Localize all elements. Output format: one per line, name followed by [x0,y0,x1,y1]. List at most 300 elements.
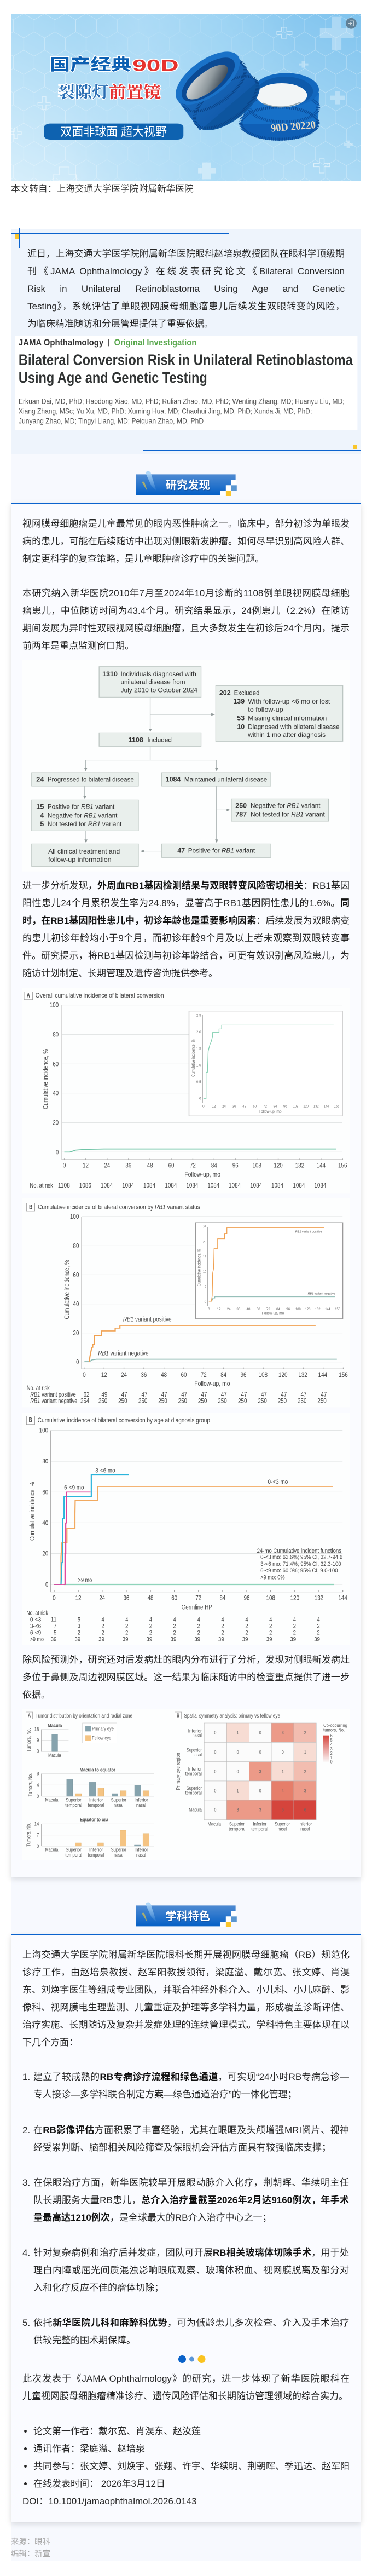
y axis labels: 20 [53,1119,59,1126]
y axis labels: 40 [42,1519,48,1526]
y axis title: Cumulative incidence, % [64,1260,71,1319]
heatmap values: 2 [304,1769,306,1774]
chart C: cumulative incidence by age at diagnosis: 2 [221,1629,224,1636]
text: intro paragraph: Risk in Unilateral Retinoblastoma Using Age and Genetic [27,284,345,294]
bars labels: Macula [45,1797,59,1803]
at risk rows: 47 [281,1391,287,1398]
at risk rows: 47 [321,1391,327,1398]
y axis labels: 60 [73,1271,79,1278]
heatmap legend: Co-occurring [323,1723,347,1728]
text: RB1 and age analysis paragraph: 件。研究提示，将RB1基因检测与初诊年龄结合，可更有效识别高风险患儿，为 [22,950,350,961]
heatmap legend [323,1723,347,1765]
bars labels: Macula [48,1753,61,1758]
text: discipline intro: 像科、视网膜电生理监测、儿童重症及护理等多学科力量，形成覆盖诊断评估、 [22,2002,350,2013]
list item 1 [22,2072,349,2100]
bars labels: Superior [66,1797,82,1803]
incidence curve [65,1149,336,1152]
bars labels: temporal [65,1853,82,1858]
list item 3: 队长期服务大量RB患儿，总介入治疗量截至2026年2月达9160例次，年手术 [33,2195,349,2205]
flow box labels: 15 [36,803,44,811]
flow box labels: 787 [235,811,247,819]
corner ornament: top left [11,228,229,248]
flow box labels: unilateral disease from [121,678,185,686]
age group curves [54,1474,334,1584]
inset chart: Cumulative incidence, % [191,1039,196,1077]
x axis labels: 144 [317,1161,326,1169]
bars labels: Superior [111,1797,126,1803]
inset chart: 48 [247,1307,251,1311]
chart C: cumulative incidence by age at diagnosis: 2 [78,1629,80,1636]
y axis labels: 60 [53,1060,59,1068]
x axis labels: 132 [315,1594,323,1601]
x axis labels [63,1161,347,1178]
bars labels: Inferior [135,1847,148,1853]
inset chart: 60 [253,1105,257,1108]
chart C: cumulative incidence by age at diagnosis: 4 [173,1616,176,1623]
flow box labels: Excluded [234,689,260,697]
inset chart: RB1 variant positive [295,1230,322,1234]
at risk rows: 47 [221,1391,227,1398]
at risk rows: 250 [118,1397,127,1404]
paper header card: JAMA Ophthalmology title block [15,336,358,430]
at risk table: >9 mo [30,1635,44,1643]
inset chart: 15 [203,1255,206,1259]
inset chart: Cumulative incidence, % [197,1248,202,1286]
chart C: cumulative incidence by age at diagnosis: 39 [123,1635,129,1643]
text: RB1 and age analysis paragraph: 进一步分析发现，外周血RB1基因检测结果与双眼转变风险密切相关：RB1基因 [22,880,350,891]
heatmap axis labels: Inferior [298,1822,312,1827]
bars labels: Inferior [89,1847,103,1853]
chart B: cumulative incidence by RB1 status [26,1203,348,1541]
heatmap cells [204,1723,316,1819]
list item 1: 专人接诊—多学科联合制定方案—绿色通道治疗”的一体化管理； [33,2089,297,2100]
inset chart: 96 [283,1105,287,1108]
text: tumor distribution paragraph [22,1655,350,1700]
chart C: cumulative incidence by age at diagnosis: 4 [197,1616,200,1623]
at risk row: 1084 [207,1182,220,1189]
chart C: cumulative incidence by age at diagnosis: 11 [51,1616,57,1623]
flow box labels: 5 [40,821,44,828]
inset chart: 10 [203,1270,206,1273]
text: intro paragraph: 刊《JAMA Ophthalmology》在线发表研究论文《Bilateral Conversion [27,266,345,276]
at risk rows: 250 [238,1397,247,1404]
at risk rows: 47 [181,1391,187,1398]
heatmap values: 0 [259,1788,261,1794]
heatmap axis labels: Macula [189,1807,202,1813]
heatmap legend: 4 [330,1742,333,1747]
heatmap values: 1 [282,1769,284,1774]
paper header card: JAMA Ophthalmology title block: JAMA Ophthalmology [19,338,103,348]
flow box labels: 139 [233,698,245,705]
chart C: cumulative incidence by age at diagnosis: 2 [269,1622,272,1629]
text: RB1 and age analysis paragraph: 阳性患儿24个月累积发生率为24.8%，显著高于RB1基因阴性患儿的1.6%。同 [22,898,350,908]
chart C: cumulative incidence by age at diagnosis: 2 [125,1622,128,1629]
heatmap legend: tumors, No. [323,1727,345,1733]
bars labels: 7 [37,1832,39,1838]
footer: source and editor [11,2537,50,2558]
curve labels: RB1 variant positive [123,1315,172,1323]
title: banner headline line 1: 90D [132,56,179,74]
flow box labels: 1310 [102,671,118,678]
heatmap values: 1 [237,1788,239,1794]
curve labels and 24-mo estimates: 6-<9 mo [64,1484,84,1491]
heatmap axis labels: nasal [300,1826,310,1832]
heatmap axis labels: nasal [193,1753,202,1757]
inset chart: 120 [303,1105,309,1108]
flow box labels: 250 [235,802,247,810]
lens: second blue lens with engraving [240,73,319,141]
chart C: cumulative incidence by age at diagnosis: 2 [246,1629,248,1636]
text: intro paragraph [27,249,345,329]
footer: source and editor: 来源：眼科 [11,2538,50,2546]
list item 2: 2. [22,2125,30,2135]
heatmap axis labels: Macula [208,1822,221,1827]
x axis labels: Germline HP [182,1603,212,1611]
y axis title: Cumulative incidence, % [29,1482,36,1541]
heatmap values: 6 [304,1807,306,1813]
y axis labels: 60 [42,1488,48,1496]
heatmap values: 0 [237,1750,239,1755]
at risk row: 1084 [250,1182,262,1189]
icon: decorative medical crosses [11,17,354,181]
at risk rows: 250 [198,1397,207,1404]
inset chart: 120 [305,1307,311,1311]
at risk rows: 47 [201,1391,207,1398]
y axis labels: 20 [42,1549,48,1557]
bars labels: 0 [37,1749,39,1754]
corner ornament: bottom right [143,436,361,454]
inset chart: 156 [334,1105,339,1108]
text: cohort paragraph [22,588,350,651]
heatmap values: 0 [259,1730,261,1736]
bars labels: Macula [45,1847,59,1853]
inset chart: 132 [315,1307,321,1311]
at risk row: 1084 [314,1182,327,1189]
list: authors and publication details [22,2426,350,2506]
heatmap values: 3 [237,1807,239,1813]
bars labels: Superior [111,1847,126,1853]
flow box labels: 1084 [166,776,181,783]
at risk table: 0-<3 [30,1616,41,1623]
chart C: cumulative incidence by age at diagnosis: 2 [125,1629,128,1636]
list item 4 [22,2247,349,2293]
chart C: cumulative incidence by age at diagnosis: 2 [173,1622,176,1629]
inset chart: 96 [286,1307,290,1311]
y axis labels: 0 [76,1358,79,1365]
heatmap values: 1 [237,1730,239,1736]
footer: source and editor: 编辑：新宣 [11,2550,50,2558]
inset chart [196,1223,343,1318]
panel: intro background [11,229,361,454]
y axis labels: 80 [53,1030,59,1038]
chart C: cumulative incidence by age at diagnosis: 4 [102,1616,104,1623]
inset chart: 2.0 [196,1031,201,1034]
x axis labels: 60 [168,1161,175,1169]
bars labels: 9 [37,1738,39,1743]
flow box labels: Positive for RB1 variant [48,803,114,811]
x axis labels: 108 [252,1161,261,1169]
chart C: cumulative incidence by age at diagnosis: 4 [125,1616,128,1623]
chart C: cumulative incidence by age at diagnosis: 2 [149,1629,152,1636]
title: banner headline line 2: 前置镜 [109,79,161,102]
list item 5: 5. [22,2318,30,2328]
x axis labels: 144 [318,1370,327,1378]
heatmap values: 0 [259,1750,261,1755]
heatmap values: 4 [282,1788,284,1794]
bars grid [42,1729,154,1846]
text: closing paragraph: 儿童视网膜母细胞瘤精准诊疗、遗传风险评估和长期随访管理领域的综合实力。 [22,2391,348,2401]
inset chart: 12 [212,1105,216,1108]
at risk rows: 47 [261,1391,267,1398]
at risk table: No. at risk [26,1609,48,1616]
flow box labels: Included [147,736,172,744]
list: authors and publication details: 共同参与：张文婷、刘焕宇、张翔、许宇、华续明、荆朝晖、季迅达、赵军阳 [33,2461,350,2471]
at risk row: 1084 [293,1182,305,1189]
lens: first blue lens with glass [164,43,271,139]
text: RB1 and age analysis paragraph [22,880,350,978]
at risk row: 1084 [122,1182,134,1189]
heatmap legend: 0 [330,1759,333,1765]
x axis labels: 72 [190,1161,196,1169]
at risk rows: 250 [178,1397,187,1404]
at risk rows: 47 [142,1391,147,1398]
chart C: cumulative incidence by age at diagnosis: 2 [102,1622,104,1629]
heatmap values: 3 [259,1769,261,1774]
x axis labels: 132 [295,1161,304,1169]
x axis labels: 132 [298,1370,307,1378]
list: authors and publication details: 论文第一作者：戴尔宽、肖淏东、赵汝莲 [33,2426,201,2436]
chart A: overall cumulative incidence [24,992,347,1319]
heatmap values: 3 [282,1730,284,1736]
text: cohort paragraph: 本研究纳入新华医院2010年7月至2024年10月诊断的1108例单眼视网膜母细胞 [22,588,350,598]
at risk rows: 47 [301,1391,307,1398]
text: background paragraph: 病的患儿，可能在后续随访中出现对侧眼新发肿瘤。如何尽早识别高风险人群、 [22,536,350,546]
inset chart: 1.0 [196,1064,201,1067]
chart title: Cumulative incidence of bilateral conversion by age at diagnosis group [38,1417,210,1424]
y axis labels: 80 [42,1457,48,1465]
curve labels and 24-mo estimates: 0-<3 mo [268,1478,288,1485]
heatmap axis labels: nasal [278,1826,287,1832]
at risk row: 1108 [58,1182,70,1189]
chart C: cumulative incidence by age at diagnosis: 5 [54,1629,56,1636]
text: intro paragraph: 为临床精准随访和分层管理提供了重要依据。 [27,319,213,329]
inset chart: 1.5 [196,1047,201,1051]
bars labels: Tumors, No. [25,1823,32,1846]
chart C: cumulative incidence by age at diagnosis: 4 [269,1616,272,1623]
bars labels: Tumors, No. [27,1773,33,1796]
x axis labels: 0 [83,1370,86,1378]
inset chart: 72 [263,1105,267,1108]
text: discipline intro: 东、刘焕宇医生等组成专业团队，并联合神经外科介入、小儿科、小儿麻醉、影 [22,1985,350,1995]
chart C: cumulative incidence by age at diagnosis: 4 [246,1616,248,1623]
x axis labels: 144 [339,1594,347,1601]
bars labels: Macula to equator [80,1767,115,1773]
bars legend [83,1723,117,1743]
inset chart: 20 [203,1241,206,1244]
inset chart: 60 [257,1307,260,1311]
x axis labels: 48 [161,1370,167,1378]
x axis labels: 36 [125,1161,131,1169]
panel: discipline features [11,1934,361,2522]
flow box labels: 47 [177,847,185,855]
list item 4: 入和化疗反应不佳的瘤体切除； [33,2283,164,2293]
flow box labels [36,671,340,863]
bars legend: Fellow eye [92,1736,111,1741]
at risk row: No. at risk [30,1182,53,1189]
heatmap axis labels [175,1728,312,1832]
at risk rows: 250 [258,1397,267,1404]
list: authors and publication details: 通讯作者：梁庭溢、赵培泉 [33,2444,145,2454]
heatmap axis labels: temporal [185,1790,202,1796]
chart C: cumulative incidence by age at diagnosis: 2 [317,1629,320,1636]
heatmap values: 1 [304,1750,306,1755]
chart C: cumulative incidence by age at diagnosis: 39 [242,1635,248,1643]
x axis labels: 24 [104,1161,111,1169]
heatmap legend: 2 [330,1751,333,1756]
curves [84,1359,337,1362]
list item 1: 1. [22,2072,30,2082]
x axis labels: 24 [121,1370,127,1378]
x axis labels: 12 [75,1594,82,1601]
heatmap values: 3 [304,1788,306,1794]
curve labels: RB1 variant negative [98,1349,149,1357]
flow box labels: 4 [40,812,44,820]
x axis labels: 108 [259,1370,268,1378]
heatmap axis labels: Superior [229,1822,245,1827]
heatmap axis labels: Superior [187,1748,202,1753]
flow box labels: Not tested for RB1 variant [251,811,325,819]
chart title: A [27,992,30,999]
flow arrows [85,697,227,851]
inset chart: 36 [233,1105,236,1108]
inset chart: 0 [205,1300,206,1303]
chart C: cumulative incidence by age at diagnosis: 5 [78,1616,80,1623]
inset chart: 0.5 [196,1081,201,1084]
x axis labels: Follow-up, mo [194,1379,230,1387]
chart C: cumulative incidence by age at diagnosis: 2 [317,1622,320,1629]
chart C: cumulative incidence by age at diagnosis: 39 [314,1635,320,1643]
x axis labels: 0 [53,1594,56,1601]
list item 2: 经受累判断、脑部相关风险筛查及保眼机会评估方面具有较强临床支撑； [33,2142,331,2153]
bars labels: Equator to ora [80,1817,108,1823]
y axis labels: 100 [50,1001,59,1008]
x axis labels: 120 [278,1370,288,1378]
x axis labels: 84 [211,1161,217,1169]
panel titles: Spatial symmetry analysis: primary vs fellow eye [184,1713,280,1719]
title: banner headline line 2 [58,79,161,102]
flow box labels: Positive for RB1 variant [188,847,255,855]
text: background paragraph: 制定更科学的复查策略，是儿童眼肿瘤诊疗中的关键问题。 [22,554,264,564]
text: intro paragraph: 近日，上海交通大学医学院附属新华医院眼科赵培泉教授团队在眼科学顶级期 [27,249,345,259]
inset chart [189,1011,342,1116]
paper header card: JAMA Ophthalmology title block: Junyang Zhao, MD; Tingyi Liang, MD; Peiquan Zhao, MD, PhD [19,417,204,425]
x axis labels: 156 [338,1161,347,1169]
bars labels: Inferior [89,1797,103,1803]
bars labels: nasal [114,1803,123,1808]
caption: source line: 本文转自：上海交通大学医学院附属新华医院 [11,183,194,194]
x axis labels: 12 [101,1370,107,1378]
list item 4: 4. [22,2247,30,2258]
flow box labels: Diagnosed with bilateral disease [248,723,340,731]
bars labels: 18 [34,1727,39,1732]
panel titles: B [177,1713,179,1719]
chart title [24,992,164,1000]
figure: tumor distribution bars and symmetry heatmap [25,1711,347,1858]
x axis labels: 0 [63,1161,66,1169]
inset chart: 144 [324,1105,329,1108]
chart title: B [29,1416,32,1424]
chart C: cumulative incidence by age at diagnosis: 39 [147,1635,152,1643]
inset chart: 84 [276,1307,280,1311]
flow arrowheads [83,713,230,852]
inset chart: 24 [227,1307,231,1311]
at risk rows: 62 [84,1391,89,1398]
heatmap values: 3 [259,1807,261,1813]
bars labels: 0 [37,1844,39,1849]
heatmap legend: 1 [330,1755,333,1760]
chart C: cumulative incidence by age at diagnosis: 39 [266,1635,272,1643]
y axis labels: 100 [39,1426,48,1434]
at risk rows: 49 [102,1391,107,1398]
flow box labels: Progressed to bilateral disease [48,776,134,783]
text: discipline intro: 诊疗工作，由赵培泉教授、赵军阳教授领衔，梁庭溢、戴尔宽、张文婷、肖淏 [22,1967,350,1978]
x axis labels: 24 [99,1594,105,1601]
heatmap values: 0 [214,1807,217,1813]
chart C: cumulative incidence by age at diagnosis: 3 [78,1622,80,1629]
heatmap values: 0 [214,1750,217,1755]
heatmap legend: 5 [330,1738,333,1743]
bars labels: 8 [37,1771,39,1777]
heading: 学科特色 [136,1902,237,1927]
x axis labels: 12 [83,1161,89,1169]
bars: primary eye [52,1734,141,1846]
text: lens engraving: 90D 20220 [270,119,316,135]
chart C: cumulative incidence by age at diagnosis: 2 [221,1622,224,1629]
heatmap axis labels: temporal [229,1826,246,1832]
chart C: cumulative incidence by age at diagnosis: 2 [149,1622,152,1629]
at risk rows: RB1 variant negative [30,1397,77,1404]
inset chart: 12 [217,1307,221,1311]
text: closing paragraph: 此次发表于《JAMA Ophthalmology》的研究，进一步体现了新华医院眼科在 [22,2373,350,2384]
flow box labels: July 2010 to October 2024 [121,687,197,694]
x axis labels: 120 [274,1161,283,1169]
x axis labels [83,1370,348,1387]
x axis labels: 156 [339,1370,348,1378]
chart C: cumulative incidence by age at diagnosis: 39 [218,1635,224,1643]
flow box labels: 10 [237,723,245,731]
text: cohort paragraph: 前两年是重点监测窗口期。 [22,641,134,651]
at risk rows: 47 [241,1391,247,1398]
y axis labels: 20 [73,1329,79,1336]
list item 3 [22,2177,349,2223]
at risk rows: 47 [161,1391,167,1398]
list item 5 [22,2318,349,2346]
text: background paragraph [22,518,350,564]
curve labels and 24-mo estimates: >9 mo: 0% [260,1574,285,1581]
at risk row: 1086 [79,1182,91,1189]
panel titles: A [28,1713,31,1719]
title: banner headline line 1: 国产经典 [50,56,131,74]
heatmap axis labels: nasal [193,1733,202,1738]
heatmap axis labels: temporal [251,1826,268,1832]
heatmap axis labels: Inferior [253,1822,267,1827]
bars labels [25,1723,148,1858]
bars labels: Tumors, No. [26,1728,32,1751]
list: authors and publication details: 在线发表时间： 2026年3月12日 [33,2479,165,2489]
flow box labels: Negative for RB1 variant [251,802,321,810]
bars labels: 0 [37,1794,39,1799]
at risk table: 6-<9 [30,1629,41,1636]
